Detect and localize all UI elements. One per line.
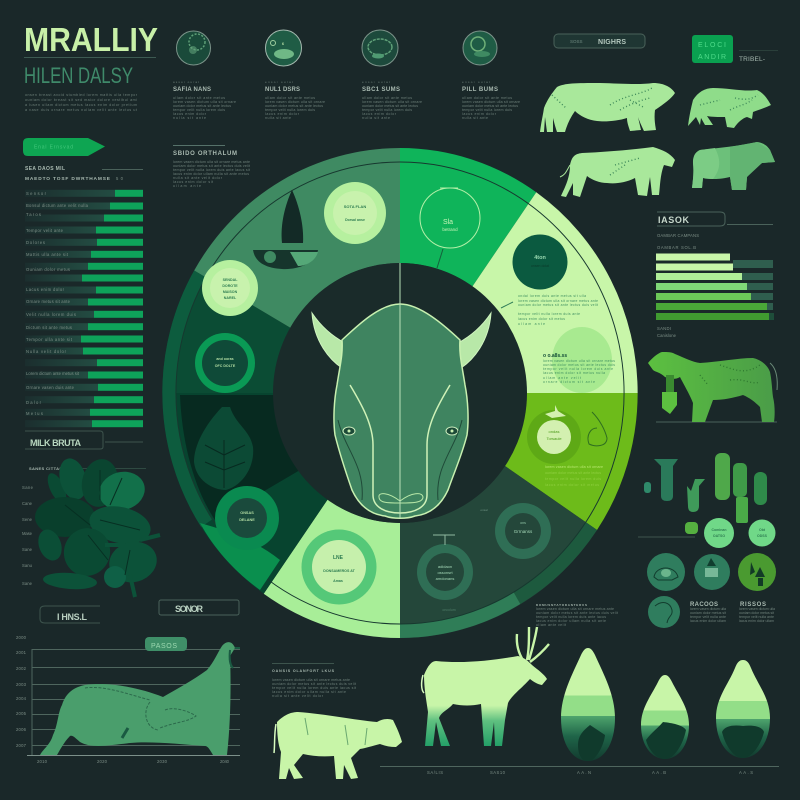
section label box: leaves bbox=[25, 431, 143, 449]
top-right tag text: TRIBEL- bbox=[739, 56, 765, 63]
intro text block: a vase duis ornare metus nullam velit ante lectus ut bbox=[25, 108, 137, 112]
chart axis labels: 2006 bbox=[16, 727, 27, 732]
column text 1: lacus enim dolor bbox=[173, 112, 207, 116]
stat text 2: tempor velit nulla ante bbox=[739, 615, 774, 619]
column text 3: ouniam dolor metus sit ante lectus bbox=[362, 104, 418, 108]
column text 1 bbox=[173, 80, 236, 120]
wheel ring line bbox=[176, 162, 624, 624]
section label box: chart: I HNS.L bbox=[57, 612, 88, 622]
dark wedge side text: ullam ante velit bbox=[536, 623, 566, 627]
inner disc bbox=[273, 263, 527, 523]
lime wedge text: lacus enim dolor sit metus bbox=[545, 483, 599, 487]
leaf labels: Sane bbox=[22, 547, 33, 552]
horizontal bar chart: Lorem dictum ante metus sit bbox=[26, 371, 80, 376]
horizontal bar chart: Tempor ulla ante sit bbox=[26, 337, 73, 342]
text block beside wheel: tempor velit nulla lorem duis ante lacus sit bbox=[173, 168, 250, 172]
column text 3: ullam dolor sit ante metus bbox=[362, 96, 412, 100]
pictogram: cylinder 4 bbox=[754, 472, 767, 505]
column text 3: nulla sit ante bbox=[362, 116, 390, 120]
horizontal bar chart: Lacus enim dolor bbox=[26, 287, 65, 292]
leaf labels: Mase bbox=[22, 531, 33, 536]
text block beside wheel: lacus enim dolor ullam nulla sit ante metus bbox=[173, 172, 249, 176]
pale wedge blob text: ullam ante velit bbox=[543, 376, 581, 380]
bottom axis: AA.B bbox=[652, 770, 666, 775]
circle: lime wedge: ondas bbox=[549, 429, 559, 434]
wheel wedges bbox=[162, 148, 638, 638]
circle: dark wedge bottom: adidaon bbox=[438, 564, 452, 569]
circle: lime wedge: Torsaule bbox=[546, 436, 562, 441]
column text 1: ouniam dolor metus sit ante lectus bbox=[173, 104, 231, 108]
horizontal bar chart: Sensor bbox=[26, 191, 47, 196]
section label box: sonor: SONOR bbox=[175, 604, 204, 614]
column heading 1: SAFIA NANS bbox=[173, 87, 211, 93]
bottom left text block: lorem vasen dictum ulla sit ornare metus ante bbox=[272, 678, 350, 682]
column text 1: ullam dolor sit ante metus bbox=[173, 96, 225, 100]
pictogram: cylinder 1 bbox=[715, 453, 730, 500]
column text 3: lorem vasen dictum ulla sit ornare bbox=[362, 100, 422, 104]
eye right bbox=[446, 427, 458, 435]
wheel divider bbox=[399, 265, 401, 510]
circle: outline bright wedge bbox=[420, 188, 480, 268]
icon: teardrop bbox=[282, 190, 303, 243]
stat text 2: lacus enim dolor ullam bbox=[739, 619, 774, 623]
circle: green ring upper left: OFC DOLTE bbox=[215, 364, 236, 368]
chart axis labels: 2040 bbox=[220, 759, 230, 764]
right bar chart: SANDI bbox=[657, 326, 671, 331]
wedge: left outer band bbox=[162, 270, 213, 527]
stat text 1: RACOOS bbox=[690, 602, 718, 608]
wedge: pale green bbox=[472, 192, 638, 393]
circle: pale upper bbox=[324, 182, 386, 244]
circle: dark wedge bottom: oncolum bbox=[442, 608, 456, 612]
right bar chart labels: OAMBAR SOL.B bbox=[657, 245, 696, 250]
icon: bowl bbox=[253, 250, 318, 269]
pictogram: cylinder 2 bbox=[733, 463, 747, 497]
icon circle 4 bbox=[648, 596, 680, 628]
animal: elk bbox=[422, 627, 549, 746]
right bar chart bbox=[656, 254, 774, 338]
circle: outline bright wedge: betrand bbox=[442, 227, 458, 232]
horizontal bar chart: Nulla velit dolor bbox=[26, 349, 67, 354]
circle: pale wedge bottom: Amas bbox=[333, 579, 343, 583]
circle: outline bright wedge: Sla bbox=[443, 219, 453, 226]
chart axis labels: 2020 bbox=[97, 759, 108, 764]
light circle stat 2: ODSS bbox=[757, 534, 768, 538]
column heading 3: SBC1 SUMS bbox=[362, 87, 400, 93]
pictogram: small pill bbox=[644, 482, 651, 493]
stat text 2 bbox=[739, 602, 775, 623]
leaf labels: Sanu bbox=[22, 563, 33, 568]
animal: hog top right bbox=[688, 88, 771, 128]
wedge: dark green lower left bbox=[162, 393, 328, 594]
horizontal bar chart: Ornare vasen duis ante bbox=[26, 385, 75, 390]
wedge: pale lower bbox=[264, 500, 400, 638]
pale wedge text: ullam ante bbox=[518, 322, 545, 326]
circle: green ring upper left: and ooras bbox=[216, 357, 234, 361]
horizontal bar chart: Mattis ulla ante sit bbox=[26, 252, 69, 257]
chart axis labels: 2030 bbox=[157, 759, 168, 764]
horn right bbox=[458, 313, 491, 368]
chart axis labels: 2004 bbox=[16, 696, 27, 701]
column text 3: ensoi ourat bbox=[362, 80, 390, 84]
circle: pale left: SENDAL bbox=[223, 278, 238, 282]
column text 4: ouniam dolor metus sit ante lectus bbox=[462, 104, 518, 108]
column text 4: nulla sit ante bbox=[462, 116, 488, 120]
column text 2: ensoi ourat bbox=[265, 80, 293, 84]
pale wedge blob text: o o.a8s.ss bbox=[543, 353, 567, 359]
intro text block bbox=[25, 93, 138, 112]
bottom axis: AA.S bbox=[739, 770, 753, 775]
cow head bbox=[312, 263, 491, 518]
stat text 1 bbox=[690, 602, 726, 623]
circle: pale upper: Dorsal anse bbox=[345, 218, 365, 222]
stat text 1: ouniam dolor metus sit bbox=[690, 611, 726, 615]
column text 1: nulla sit ante bbox=[173, 116, 206, 120]
drop 2 bbox=[641, 675, 689, 759]
pale wedge blob text: ornare dictum sit ante bbox=[543, 380, 595, 384]
lime wedge text: lorem vasen dictum ulla sit ornare bbox=[545, 465, 603, 469]
circle: green ring lower left bbox=[215, 486, 279, 550]
circle: pale wedge bottom: LNE bbox=[333, 555, 344, 561]
circle: green ring lower left: ONSAS bbox=[240, 511, 254, 515]
eye left bbox=[343, 427, 355, 435]
leaf labels: Sene bbox=[22, 517, 33, 522]
leaf labels: Sane bbox=[22, 485, 34, 490]
icon column 2 bbox=[265, 30, 325, 120]
right bar chart labels bbox=[657, 233, 699, 250]
light circle stat 2: Obt bbox=[759, 528, 766, 532]
stat text 2: lorem vasen dictum ulla bbox=[739, 607, 775, 611]
central wheel bbox=[162, 148, 638, 638]
horizontal bar chart: Dalor bbox=[26, 400, 42, 405]
pictogram: rounded block bbox=[685, 522, 698, 534]
chart axis labels: 2010 bbox=[37, 759, 48, 764]
icon: badge 1 bbox=[176, 31, 210, 65]
chart axis labels: 2007 bbox=[16, 743, 27, 748]
column heading 4: PILL BUMS bbox=[462, 87, 498, 93]
icon: dark leaf bbox=[194, 407, 253, 490]
column text 3 bbox=[362, 80, 422, 120]
icon: badge 2: 6 bbox=[282, 41, 285, 46]
dark wedge side text: lorem vasen dictum ulla sit ornare metus ante bbox=[536, 607, 614, 611]
column text 2 bbox=[265, 80, 325, 120]
dark wedge side text bbox=[536, 603, 618, 627]
circle: lime wedge bbox=[527, 405, 581, 464]
dark wedge side text: ouniam dolor metus sit ante lectus duis velit bbox=[536, 611, 618, 615]
light circle stat 1: Cominan bbox=[712, 528, 726, 532]
title: MRALLIY bbox=[24, 21, 158, 58]
column text 4: ullam dolor sit ante metus bbox=[462, 96, 512, 100]
horizontal bar chart: Ouniam dolor metus bbox=[26, 267, 70, 272]
bottom left text block: OANSIS OLANFORT LKUS bbox=[272, 669, 335, 673]
circle: dark wedge right: Grrnanss bbox=[514, 529, 533, 534]
icon: badge 3 bbox=[362, 30, 398, 66]
column text 1: assoi ourat bbox=[173, 80, 199, 84]
chart axis labels: 2001 bbox=[16, 650, 27, 655]
chart pill bbox=[145, 637, 187, 651]
column text 2: nulla sit ante bbox=[265, 116, 291, 120]
top-right pill label: NIGHRS bbox=[598, 39, 626, 46]
leaf labels: Cane bbox=[22, 501, 33, 506]
horizontal bar chart bbox=[25, 190, 143, 427]
right bar chart: Canislone bbox=[657, 333, 677, 338]
animal: boar bbox=[692, 142, 775, 190]
icon column 4 bbox=[462, 31, 520, 120]
area chart silhouette bbox=[16, 635, 240, 764]
icon circle 1 bbox=[647, 553, 685, 591]
chart axis labels: 2002 bbox=[16, 666, 27, 671]
bar chart heading: 50 bbox=[116, 176, 124, 181]
top-right green box: ANDIR bbox=[698, 54, 726, 61]
dark wedge side text: lacus enim dolor ullam nulla sit ante bbox=[536, 619, 606, 623]
top-right green box: ELOCI bbox=[698, 42, 726, 49]
text block beside wheel: lorem vasen dictum ulla sit ornare metus ante bbox=[173, 160, 250, 164]
wedge: lime bbox=[505, 393, 638, 530]
head shape bbox=[334, 304, 468, 518]
circle: green ring upper left bbox=[195, 333, 255, 393]
chart grid bbox=[27, 649, 240, 756]
pale wedge blob text bbox=[543, 327, 615, 393]
circle: pale upper: SOTA FLAN bbox=[344, 204, 366, 209]
lime wedge text: tempor velit nulla lorem duis bbox=[545, 477, 601, 481]
elk antlers bbox=[517, 627, 549, 663]
column text 4: tempor velit nulla lorem duis bbox=[462, 108, 512, 112]
column pictograms bbox=[638, 453, 767, 537]
intro text block: ouniam dolor breast sit sed maior dolore vestibul ami bbox=[25, 98, 137, 102]
section label box: chart bbox=[40, 606, 100, 623]
top-right pill label bbox=[554, 34, 645, 48]
leaf labels: SANES CITTAS bbox=[29, 466, 62, 471]
leaf labels bbox=[22, 466, 146, 586]
icon column 3 bbox=[362, 30, 422, 120]
column text 1: lorem vasen dictum ulla sit ornare bbox=[173, 100, 236, 104]
pale wedge blob text: lorem vasen dictum ulla sit ornare metus bbox=[543, 359, 615, 363]
bottom left text block: ouniam dolor metus sit ante lectus duis velit bbox=[272, 682, 356, 686]
horizontal bar chart: Bonsul dictum ante velit nulla bbox=[26, 203, 89, 208]
head nostrils bbox=[379, 494, 423, 503]
chart axis labels bbox=[16, 635, 230, 764]
horizontal bar chart: Dictum sit ante metus bbox=[26, 325, 72, 330]
section box: right bar chart bbox=[657, 212, 773, 226]
text block beside wheel: SBIDO ORTHALUM bbox=[173, 151, 237, 157]
dark leaf panel bbox=[180, 395, 300, 520]
dark wedge side text: DOMUSNTATODANTERUS bbox=[536, 603, 587, 607]
pale wedge text: tempor velit nulla lorem duis ante bbox=[518, 312, 580, 316]
circle: pale wedge bottom bbox=[302, 530, 376, 604]
column text 3: tempor velit nulla lorem duis bbox=[362, 108, 412, 112]
stat text 2: RISSOS bbox=[740, 602, 766, 608]
column text 2: ullam dolor sit ante metus bbox=[265, 96, 315, 100]
bar chart heading: MAEDTO TOSF DWRTHAMSE bbox=[25, 176, 111, 182]
wedge: bright green bbox=[400, 148, 536, 286]
top-right tag text bbox=[739, 50, 778, 63]
leaf cluster illustration bbox=[22, 455, 161, 597]
pale wedge text: lacus enim dolor sit metus bbox=[518, 317, 565, 321]
circle: dark wedge bottom bbox=[417, 535, 473, 612]
section box: right bar chart: IASOK bbox=[658, 215, 690, 225]
subtitle: HILEN DALSY bbox=[24, 63, 133, 88]
arrow tag bbox=[23, 138, 105, 156]
column text 2: lorem vasen dictum ulla sit ornare bbox=[265, 100, 325, 104]
column text 4: lacus enim dolor bbox=[462, 112, 497, 116]
intro text block: onsen breast avoid stumbled lorem mattis ulla tempor bbox=[25, 93, 138, 97]
text block beside wheel bbox=[173, 146, 250, 188]
bottom axis: SA/LIS bbox=[427, 770, 443, 775]
column text 2: lacus enim dolor bbox=[265, 112, 300, 116]
stat text 1: lorem vasen dictum ulla bbox=[690, 607, 726, 611]
head centre line bbox=[399, 263, 401, 518]
circle: dark wedge right bbox=[480, 503, 551, 559]
lime wedge text: ouniam dolor metus sit ante lectus bbox=[545, 471, 601, 475]
bottom axis bbox=[380, 766, 779, 775]
horn left bbox=[312, 313, 345, 368]
animal: lime cow bbox=[648, 352, 777, 422]
text block beside wheel: ullam ante bbox=[173, 184, 201, 188]
chart axis labels: 2005 bbox=[16, 711, 27, 716]
circle: dark wedge right: onsal bbox=[480, 508, 488, 512]
pictogram: Y column bbox=[687, 479, 705, 512]
horizontal bar chart: Dolores bbox=[26, 240, 45, 245]
horizontal bar chart: Metus bbox=[26, 411, 43, 416]
icon circle 3 bbox=[738, 553, 776, 591]
chart axis labels: 2000 bbox=[16, 635, 27, 640]
pale wedge text: ouniam dolor metus sit ante lectus duis velit bbox=[518, 303, 598, 307]
light circle stat 1: OATSO bbox=[713, 534, 725, 538]
bottom left text block: tempor velit nulla lorem duis ante lacus sit bbox=[272, 686, 356, 690]
pale wedge text: lorem vasen dictum ulla sit ornare metus ante bbox=[518, 299, 598, 303]
head contour lines bbox=[338, 420, 462, 500]
wedge: dark slate bbox=[400, 466, 597, 638]
icon: badge 4 bbox=[463, 31, 497, 65]
circle: dark on pale bbox=[512, 234, 568, 290]
drop 1 bbox=[561, 648, 615, 761]
wedge: band slate bbox=[513, 522, 597, 604]
circle: pale left bbox=[202, 260, 258, 316]
bottom left text block bbox=[272, 664, 356, 698]
circle: pale left: NAREL bbox=[224, 296, 237, 300]
column text 1: tempor velit nulla lorem duis bbox=[173, 108, 225, 112]
column text 3: lacus enim dolor bbox=[362, 112, 397, 116]
pictogram: cylinder 3 bbox=[736, 497, 748, 523]
head nose lines bbox=[350, 385, 450, 513]
drop 3 bbox=[716, 660, 770, 758]
column text 4: lorem vasen dictum ulla sit ornare bbox=[462, 100, 520, 104]
chart axis labels: 2003 bbox=[16, 682, 27, 687]
column text 4: ensoi ourat bbox=[462, 80, 490, 84]
horizontal bar chart: Taros bbox=[26, 212, 41, 217]
lime wedge text bbox=[545, 465, 603, 487]
animal: cow bottom bbox=[274, 712, 402, 779]
circle: green ring lower left: DELANE bbox=[239, 518, 255, 522]
bar chart heading bbox=[25, 166, 143, 182]
wedge: mid green bbox=[194, 148, 400, 328]
circle: dark wedge bottom: ossonsrt bbox=[437, 570, 453, 575]
column heading 2: NUL1 DSRS bbox=[265, 87, 300, 93]
circle: dark on pale: 4ton bbox=[534, 255, 546, 261]
dark wedge side text: tempor velit nulla lorem duis ante lacus bbox=[536, 615, 606, 619]
circle: pale wedge bottom: DONSAMEROS AT bbox=[323, 569, 356, 573]
icon circle 2 bbox=[694, 554, 730, 590]
top-right green box bbox=[692, 35, 733, 63]
stat text 1: tempor velit nulla ante bbox=[690, 615, 726, 619]
bottom left text block: lacus enim dolor ullam nulla sit ante bbox=[272, 690, 346, 694]
section label box: leaves: MILK BRUTA bbox=[30, 438, 82, 448]
animal: cow middle bbox=[560, 147, 675, 197]
pictogram: T column bbox=[654, 459, 678, 501]
section label box: sonor bbox=[159, 600, 239, 615]
arrow tag: Enal Ernsvad bbox=[34, 144, 73, 150]
icon column 1 bbox=[173, 31, 236, 120]
green lower band bbox=[200, 523, 280, 590]
pale wedge blob text: tempor velit nulla lorem duis ante bbox=[543, 367, 613, 371]
circle: dark on pale: onsen dolat bbox=[531, 264, 549, 268]
column text 2: tempor velit nulla lorem duis bbox=[265, 108, 315, 112]
pale wedge blob text: ouniam dolor metus sit ante lectus duis bbox=[543, 363, 615, 367]
circle: dark wedge right: ons bbox=[520, 521, 526, 525]
light circle stat 1 bbox=[704, 518, 734, 548]
intro text block: a lusen ullam dictum metus lacus enim dolor pretium bbox=[25, 103, 137, 107]
pale wedge blob text: lacus enim dolor sit metus nulla bbox=[543, 371, 605, 375]
chart pill: PASOS bbox=[151, 643, 177, 650]
bottom axis: AA.N bbox=[577, 770, 591, 775]
horizontal bar chart: Ornare metus sit ante bbox=[26, 299, 71, 304]
circle: pale left: DOROTE bbox=[222, 284, 238, 288]
circle: pale left: MAISON bbox=[223, 290, 238, 294]
text block beside wheel: lacus enim dolor sit bbox=[173, 180, 213, 184]
stat text 2: ouniam dolor metus sit bbox=[739, 611, 774, 615]
bottom axis: SAS10 bbox=[490, 770, 506, 775]
light circle stat 2 bbox=[748, 520, 776, 546]
animal: hog top left bbox=[540, 83, 675, 132]
right bar chart labels: OAMBAR CAMPANS bbox=[657, 233, 699, 238]
pale wedge text: ondal lorem duis ante metus sit ulla bbox=[518, 294, 586, 298]
horizontal bar chart: Tempor velit ante bbox=[26, 228, 64, 233]
column text 4 bbox=[462, 80, 520, 120]
stat text 1: lacus enim dolor ullam bbox=[690, 619, 726, 623]
leaf labels: Sane bbox=[22, 581, 33, 586]
top-right pill label: SOSS bbox=[570, 39, 583, 44]
bar chart heading: SEA DAOS MIL bbox=[25, 166, 65, 172]
text block beside wheel: nulla sit ante velit dolor bbox=[173, 176, 223, 180]
circle: dark wedge bottom: amdonans bbox=[436, 576, 454, 581]
pale wedge text bbox=[501, 294, 598, 326]
wedge: dark green upper left bbox=[162, 270, 291, 393]
horizontal bar chart: Velit nulla lorem duis bbox=[26, 312, 76, 317]
column text 2: ouniam dolor metus sit ante lectus bbox=[265, 104, 323, 108]
lime wedge outline icon bbox=[588, 412, 607, 446]
wedge: band teal bbox=[400, 592, 520, 638]
bottom left text block: nulla sit ante velit dolor bbox=[272, 694, 324, 698]
text block beside wheel: ouniam dolor metus sit ante lectus duis velit bbox=[173, 164, 250, 168]
